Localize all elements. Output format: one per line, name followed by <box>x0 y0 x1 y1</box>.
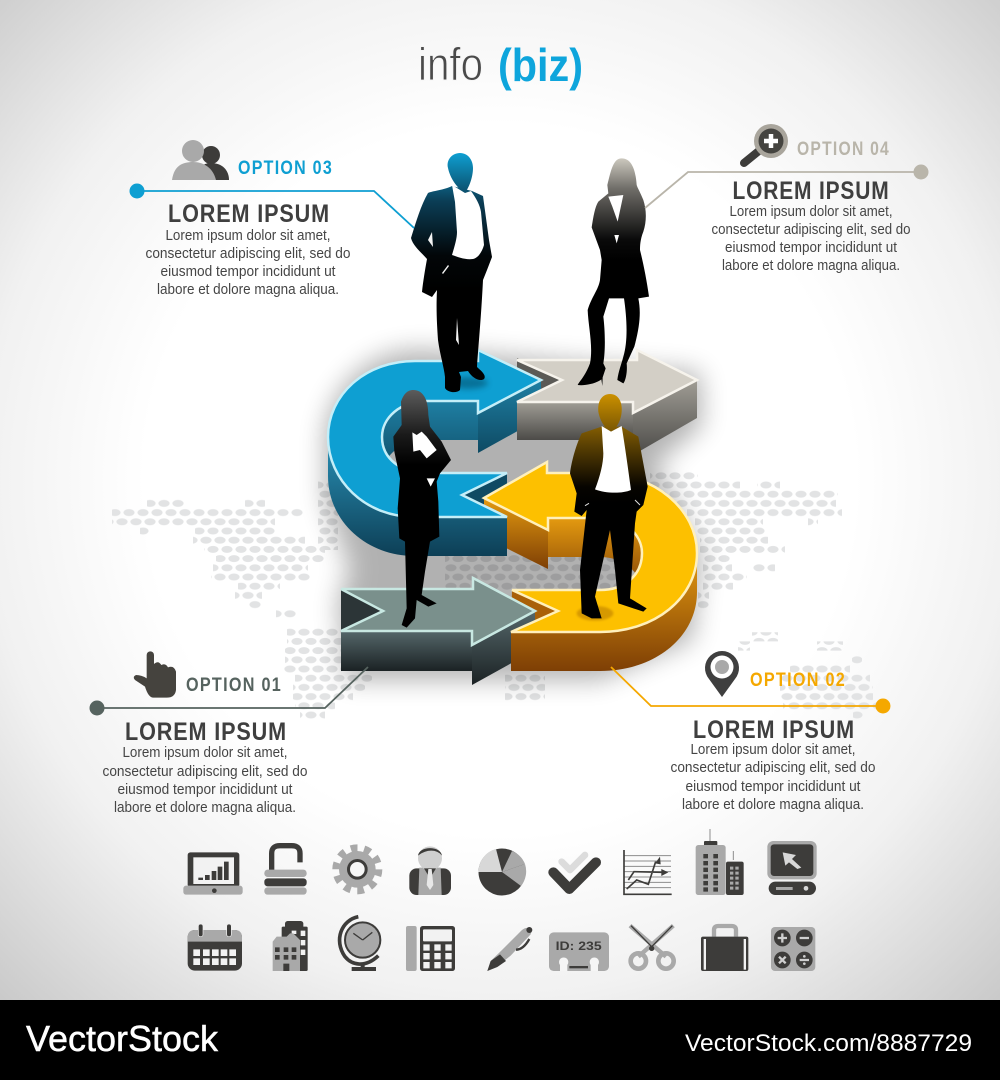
connector line <box>90 667 368 716</box>
heading: LOREM IPSUM <box>125 718 287 746</box>
body text <box>670 741 876 813</box>
drop shadow <box>325 350 702 680</box>
icon: line chart <box>624 850 672 894</box>
silhouette: man, orange <box>570 394 648 621</box>
body text: consectetur adipiscing elit, sed do <box>712 221 910 238</box>
body text <box>102 744 308 816</box>
heading: LOREM IPSUM <box>168 200 330 228</box>
icon: padlock <box>264 846 307 895</box>
panel: option 03 <box>130 140 414 298</box>
arrow: blue <box>328 350 541 556</box>
icon: people <box>172 140 229 180</box>
icon: calendar <box>188 924 242 971</box>
icon: laptop <box>183 852 243 895</box>
icon: pointing hand <box>134 651 176 698</box>
silhouette: woman, grey <box>578 158 649 386</box>
icon: check mark <box>553 855 596 889</box>
icon: gear <box>337 849 378 890</box>
option label: OPTION 01 <box>186 675 282 696</box>
icon: map pin <box>705 651 739 697</box>
silhouette: woman, dark <box>393 390 451 628</box>
icon: ID card <box>549 932 609 971</box>
connector line <box>611 667 890 714</box>
icon: ID card: ID: 235 <box>556 939 602 953</box>
icon: briefcase <box>701 926 748 971</box>
footer bar: VectorStock.com/8887729 <box>685 1030 972 1057</box>
connector line <box>645 164 928 208</box>
connector line <box>130 184 414 228</box>
option label: OPTION 03 <box>238 158 333 179</box>
panel: option 01 <box>90 651 368 816</box>
arrow: yellow <box>484 462 697 671</box>
icon row: right icons <box>487 829 817 971</box>
body text: labore et dolore magna aliqua. <box>722 257 900 274</box>
dotted world map <box>112 471 877 720</box>
icon: globe clock <box>340 917 380 969</box>
panel: option 04 <box>645 124 928 274</box>
icon: scissors <box>630 926 674 969</box>
heading: LOREM IPSUM <box>732 177 890 205</box>
body text: consectetur adipiscing elit, sed do <box>670 759 876 776</box>
icon: computer monitor <box>767 841 817 895</box>
heading: LOREM IPSUM <box>693 716 855 744</box>
icon: pen <box>487 927 532 971</box>
body text: labore et dolore magna aliqua. <box>682 796 864 813</box>
arrow: grey-green <box>341 578 535 685</box>
footer bar <box>0 1000 1000 1080</box>
body text: Lorem ipsum dolor sit amet, <box>690 741 856 758</box>
title: info <box>418 38 483 90</box>
icon: businessman <box>409 846 451 895</box>
body text: labore et dolore magna aliqua. <box>157 281 339 298</box>
option label: OPTION 02 <box>750 670 846 691</box>
body text: eiusmod tempor incididunt ut <box>686 778 861 795</box>
panel: option 02 <box>611 651 890 813</box>
icon: desk phone calculator <box>406 926 455 971</box>
body text: Lorem ipsum dolor sit amet, <box>166 227 330 244</box>
icon: skyscrapers <box>696 829 744 895</box>
icon row: left icons <box>183 846 455 971</box>
icon: math operations <box>771 927 815 971</box>
notch walls <box>462 358 562 632</box>
body text: eiusmod tempor incididunt ut <box>118 781 293 798</box>
3D arrows diagram <box>325 350 702 685</box>
option label: OPTION 04 <box>797 139 890 160</box>
arrow: grey <box>517 350 697 455</box>
body text: consectetur adipiscing elit, sed do <box>146 245 350 262</box>
body text: eiusmod tempor incididunt ut <box>160 263 336 280</box>
icon: office building <box>273 921 308 971</box>
body text: consectetur adipiscing elit, sed do <box>102 763 308 780</box>
body text: eiusmod tempor incididunt ut <box>725 239 898 256</box>
body text: Lorem ipsum dolor sit amet, <box>730 203 892 220</box>
body text <box>712 203 910 274</box>
silhouette: man, blue <box>411 153 492 392</box>
title <box>418 38 583 91</box>
body text <box>146 227 350 298</box>
body text: Lorem ipsum dolor sit amet, <box>122 744 288 761</box>
title: (biz) <box>498 39 583 91</box>
footer bar: VectorStock <box>26 1018 219 1059</box>
body text: labore et dolore magna aliqua. <box>114 799 296 816</box>
icon: pie chart <box>478 848 526 896</box>
icon: magnifier <box>744 124 788 163</box>
